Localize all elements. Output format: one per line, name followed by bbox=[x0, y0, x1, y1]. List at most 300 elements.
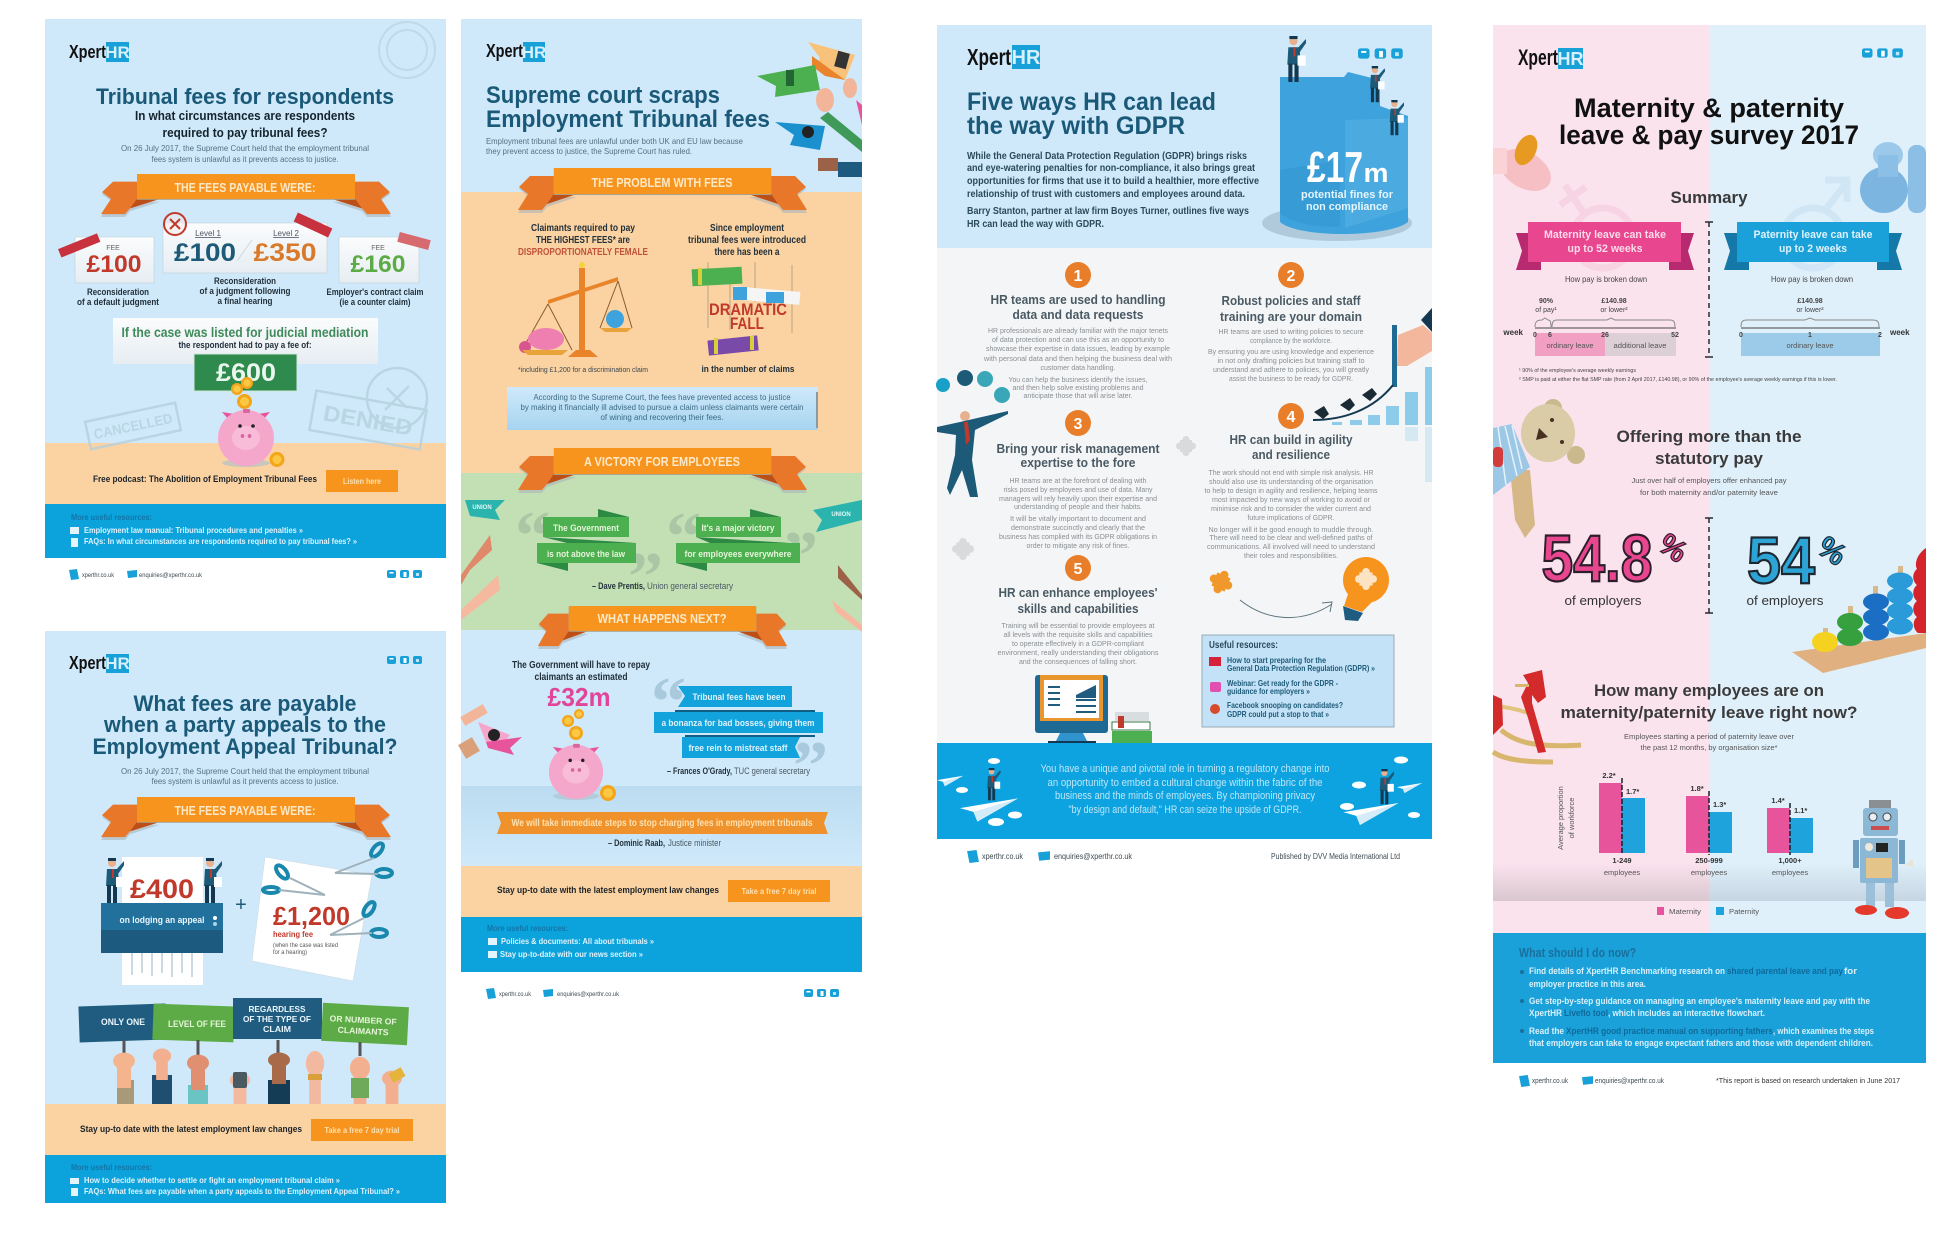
timeline: paternity pay: week bbox=[1889, 328, 1910, 337]
timeline: paternity pay bbox=[1739, 275, 1910, 356]
ribbon: a victory for employees: A VICTORY FOR EMPLOYEES bbox=[584, 454, 740, 469]
resources strip: How to decide whether to settle or fight an employment tribunal claim » bbox=[84, 1175, 340, 1185]
fee card: counter claim: £160 bbox=[350, 251, 406, 278]
title bbox=[1559, 93, 1859, 150]
quote: the government: ” bbox=[628, 539, 663, 616]
attribution: dave prentis: – Dave Prentis, bbox=[592, 581, 645, 591]
illustration: pink flag bbox=[458, 704, 522, 759]
section 3: understanding of people and their habits. bbox=[1014, 502, 1142, 511]
footer contacts: enquiries@xperthr.co.uk bbox=[1595, 1078, 1664, 1085]
box: useful resources: General Data Protection Regulation (GDPR) » bbox=[1227, 664, 1375, 673]
social icons bbox=[1862, 48, 1903, 58]
text: highest fees: THE HIGHEST FEES* are bbox=[536, 235, 630, 246]
fee card: final hearing: Level 1 bbox=[195, 229, 221, 238]
timeline: maternity pay: 52 bbox=[1671, 332, 1679, 339]
trial call to action: Stay up-to date with the latest employment law changes bbox=[497, 885, 719, 896]
title bbox=[967, 88, 1216, 140]
footer contacts: *This report is based on research undertaken in June 2017 bbox=[1716, 1076, 1900, 1085]
quote: bonanza for bad bosses: a bonanza for bad bosses, giving them bbox=[662, 718, 814, 729]
fee card: final hearing: £100 bbox=[174, 239, 236, 267]
quote: major victory: ” bbox=[783, 518, 818, 595]
ribbon: maternity leave bbox=[1516, 222, 1694, 270]
protest sign: level of fee: LEVEL OF FEE bbox=[168, 1019, 226, 1029]
section 5: Training will be essential to provide employees at bbox=[1002, 621, 1155, 630]
attribution: dominic raab: – Dominic Raab, bbox=[608, 838, 665, 848]
what should I do now: Find details of XpertHR Benchmarking research on bbox=[1529, 966, 1725, 976]
timeline: paternity pay: 1 bbox=[1808, 332, 1812, 339]
illustration: paper planes right bbox=[1340, 756, 1422, 825]
illustration: baby shoes bbox=[1860, 142, 1926, 213]
panel: employment appeal tribunal fees bbox=[45, 631, 446, 1203]
statistic: 54%: % bbox=[1811, 530, 1852, 573]
resources strip: More useful resources: bbox=[71, 1163, 152, 1172]
ribbon: paternity leave: Paternity leave can take bbox=[1754, 229, 1872, 241]
text: enhanced pay: for both maternity and/or paternity leave bbox=[1640, 488, 1778, 497]
callout: supreme court statement: According to the Supreme Court, the fees have prevented access to justice bbox=[534, 392, 791, 402]
illustration: abacus toy bbox=[1792, 548, 1926, 673]
timeline: maternity pay bbox=[1502, 275, 1679, 356]
protest sign: or number of claimants bbox=[321, 1003, 409, 1045]
fee card: counter claim: FEE bbox=[371, 245, 385, 252]
bar chart: 1.3* bbox=[1713, 800, 1726, 809]
text: £32m repayment bbox=[512, 660, 650, 712]
illustration: blue tower with £17m: non compliance bbox=[1306, 201, 1388, 213]
what should I do now: for bbox=[1844, 966, 1858, 976]
intro text bbox=[121, 143, 369, 164]
box: useful resources bbox=[1202, 635, 1394, 727]
illustration: toy robot bbox=[1853, 800, 1913, 919]
heading: offering more: statutory pay bbox=[1655, 449, 1764, 468]
protest sign: only one: ONLY ONE bbox=[101, 1017, 145, 1027]
text: highest fees: DISPROPORTIONATELY FEMALE bbox=[518, 247, 648, 258]
footer contacts bbox=[967, 850, 1400, 863]
plus sign: + bbox=[235, 894, 247, 916]
timeline: maternity pay: ordinary leave bbox=[1546, 343, 1594, 350]
fee card: default judgment: Reconsideration bbox=[87, 287, 149, 298]
quote: major victory: It's a major victory bbox=[702, 523, 775, 534]
legend: Maternity bbox=[1669, 907, 1701, 916]
banner: immediate steps bbox=[497, 812, 828, 834]
section 4: future implications of GDPR. bbox=[1248, 513, 1334, 522]
intro text: On 26 July 2017, the Supreme Court held that the employment tribunal bbox=[121, 766, 369, 776]
section 2: 2 bbox=[1287, 268, 1296, 285]
text: highest fees bbox=[518, 223, 648, 258]
text: highest fees: Claimants required to pay bbox=[531, 223, 635, 234]
protest sign: regardless of the type of claim: CLAIM bbox=[263, 1024, 291, 1034]
logo: Xpert bbox=[967, 44, 1011, 70]
intro text: relationship of trust with customers and employees around data. bbox=[967, 189, 1245, 200]
text: £32m repayment: £32m bbox=[548, 682, 610, 712]
ribbon: what happens next: WHAT HAPPENS NEXT? bbox=[598, 611, 727, 626]
closing message: "by design and default," HR can seize the upside of GDPR. bbox=[1068, 804, 1302, 816]
logo: HR bbox=[1558, 49, 1584, 69]
section 2: understand and adhere to policies, you will greatly bbox=[1213, 365, 1369, 374]
logo: HR bbox=[105, 43, 130, 62]
timeline: paternity pay: or lower² bbox=[1796, 307, 1824, 314]
timeline: maternity pay: 90% bbox=[1539, 298, 1554, 305]
illustration: teddy bear bbox=[1493, 399, 1585, 538]
resources strip bbox=[70, 1163, 400, 1196]
title: Supreme court scraps bbox=[486, 82, 720, 109]
statistic: 54% bbox=[1746, 523, 1852, 608]
closing message: You have a unique and pivotal role in turning a regulatory change into bbox=[1040, 763, 1330, 775]
callout: judicial mediation: If the case was listed for judicial mediation bbox=[122, 325, 368, 340]
statistic: 54.8%: 54.8 bbox=[1542, 521, 1652, 595]
section 3: managers will rely heavily upon their expertise and bbox=[999, 494, 1157, 503]
what should I do now: XpertHR good practice manual on supporting fathers bbox=[1566, 1026, 1773, 1036]
faded stamps: CANCELLED bbox=[92, 410, 174, 442]
section 4: to help to design in agility and resilience, helping teams bbox=[1204, 486, 1378, 495]
flags: union bbox=[465, 500, 862, 532]
bar chart: employees bbox=[1604, 868, 1640, 877]
box: useful resources: Webinar: Get ready for the GDPR - bbox=[1227, 679, 1338, 688]
section 5: and the consequences of falling short. bbox=[1019, 657, 1137, 666]
section 4: should also use its understanding of the organisation bbox=[1209, 477, 1373, 486]
section 2: training are your domain bbox=[1220, 309, 1362, 324]
trial call to action bbox=[80, 1119, 413, 1141]
box: useful resources: Useful resources: bbox=[1209, 640, 1278, 651]
quote: bonanza for bad bosses: Tribunal fees have been bbox=[692, 692, 786, 703]
subtitle: required to pay tribunal fees? bbox=[162, 125, 328, 140]
logo: HR bbox=[522, 43, 546, 62]
banner: immediate steps: We will take immediate steps to stop charging fees in employment tribunals bbox=[512, 818, 813, 829]
quote: major victory bbox=[666, 499, 818, 595]
footnote and caption: in the number of claims bbox=[702, 364, 794, 375]
illustration: blue tower with £17m bbox=[1262, 36, 1412, 241]
icon: faint male symbol bbox=[1783, 180, 1847, 268]
fee card: final hearing: £350 bbox=[254, 239, 316, 267]
text: chart description bbox=[1624, 732, 1795, 752]
ribbon: paternity leave bbox=[1724, 222, 1902, 270]
bar chart: employees bbox=[1772, 868, 1808, 877]
closing message bbox=[1040, 763, 1330, 816]
intro text: While the General Data Protection Regulation (GDPR) brings risks bbox=[967, 151, 1247, 162]
title: leave & pay survey 2017 bbox=[1559, 120, 1859, 150]
logo: Xpert bbox=[69, 653, 106, 673]
what should I do now bbox=[1519, 945, 1874, 1048]
quote: bonanza for bad bosses: “ bbox=[651, 664, 686, 741]
section 4: The work should not end with simple risk analysis. HR bbox=[1208, 468, 1374, 477]
timeline: maternity pay: of pay¹ bbox=[1535, 307, 1557, 314]
quote: major victory: for employees everywhere bbox=[684, 549, 792, 560]
fee card: counter claim: (ie a counter claim) bbox=[340, 297, 410, 308]
section 4: their roles and responsibilities. bbox=[1244, 551, 1338, 560]
intro text bbox=[121, 766, 369, 786]
illustration: dramatic fall bbox=[692, 262, 800, 356]
footer contacts bbox=[69, 569, 422, 580]
fee card: default judgment: of a default judgment bbox=[77, 297, 160, 308]
statistic: 54%: of employers bbox=[1746, 593, 1824, 608]
bar chart: employees bbox=[1691, 868, 1727, 877]
quote: the government: is not above the law bbox=[547, 549, 626, 560]
icon: faint female symbol bbox=[1560, 185, 1633, 268]
section 3: expertise to the fore bbox=[1020, 455, 1136, 470]
illustration: blue tower with £17m: potential fines for bbox=[1301, 189, 1394, 201]
section 1: You can help the business identify the issues, bbox=[1008, 375, 1148, 384]
protest sign: level of fee bbox=[152, 1004, 235, 1042]
what should I do now: Read the bbox=[1529, 1026, 1564, 1036]
fee card: counter claim bbox=[326, 232, 431, 308]
text: chart description: Employees starting a period of paternity leave over bbox=[1624, 732, 1795, 741]
illustration: hand pen runners and bars bbox=[1313, 308, 1432, 482]
quote: the government bbox=[515, 498, 663, 616]
footer contacts: xperthr.co.uk bbox=[82, 572, 115, 579]
section 2: in not only drafting policies but training staff to bbox=[1218, 356, 1364, 365]
section 2: HR teams are used to writing policies to secure bbox=[1218, 327, 1364, 336]
illustration: £400 shredder bbox=[101, 857, 223, 985]
section 1: and then help solve existing problems and bbox=[1012, 383, 1144, 392]
heading: how many employees bbox=[1560, 681, 1858, 722]
section 1: data and data requests bbox=[1012, 307, 1144, 322]
social icons bbox=[1358, 48, 1403, 59]
title bbox=[92, 691, 398, 759]
podcast call to action: Free podcast: The Abolition of Employment Tribunal Fees bbox=[93, 474, 317, 485]
text: since fees: Since employment bbox=[710, 223, 785, 234]
text: chart description: the past 12 months, by organisation size* bbox=[1640, 743, 1778, 752]
what should I do now: , which includes an interactive flowchart. bbox=[1608, 1008, 1765, 1018]
intro text: HR can lead the way with GDPR. bbox=[967, 219, 1104, 230]
fee card: final hearing: Reconsideration bbox=[214, 276, 276, 287]
attribution: frances o'grady: TUC general secretary bbox=[734, 766, 810, 776]
box: useful resources: Facebook snooping on candidates? bbox=[1227, 701, 1343, 710]
quote: bonanza for bad bosses: free rein to mistreat staff bbox=[688, 743, 788, 754]
resources strip: More useful resources: bbox=[71, 513, 152, 522]
callout: supreme court statement: by making it financially ill advised to pursue a claim unless claimants were certain bbox=[520, 402, 804, 412]
what should I do now: XpertHR bbox=[1529, 1008, 1562, 1018]
ribbon: maternity leave: up to 52 weeks bbox=[1568, 243, 1642, 255]
intro text: opportunities for firms that use it to build a healthier, more effective bbox=[967, 176, 1259, 187]
footer contacts: xperthr.co.uk bbox=[982, 852, 1024, 861]
footnotes: ¹ 90% of the employee's average weekly earnings bbox=[1519, 368, 1636, 374]
logo: HR bbox=[1012, 47, 1041, 69]
flags: union: UNION bbox=[831, 512, 851, 518]
illustration: blue tower with £17m: m bbox=[1364, 158, 1388, 188]
section 1: showcase their expertise in data issues, leading by example bbox=[986, 344, 1170, 353]
attribution: dominic raab: Justice minister bbox=[668, 838, 721, 848]
text: enhanced pay: Just over half of employers offer enhanced pay bbox=[1632, 476, 1787, 485]
resources strip: FAQs: In what circumstances are respondents required to pay tribunal fees? » bbox=[84, 536, 357, 546]
timeline: paternity pay: 0 bbox=[1739, 332, 1743, 339]
trial call to action: Take a free 7 day trial bbox=[324, 1126, 400, 1135]
section 4: HR can build in agility bbox=[1230, 432, 1353, 447]
section 4: There will need to be clear and well-defined paths of bbox=[1210, 533, 1373, 542]
protest sign: only one bbox=[78, 1003, 167, 1042]
illustration: man with data icons bbox=[936, 370, 1010, 497]
footer contacts bbox=[486, 988, 839, 999]
resources strip: Employment law manual: Tribunal procedures and penalties » bbox=[84, 525, 303, 535]
illustration: flags and raised arms bbox=[757, 42, 862, 177]
section 4: No longer will it be good enough to muddle through. bbox=[1208, 525, 1374, 534]
text: since fees: tribunal fees were introduced bbox=[688, 235, 806, 246]
timeline: maternity pay: How pay is broken down bbox=[1565, 275, 1647, 284]
faded stamps: DENIED bbox=[321, 400, 414, 441]
attribution: dave prentis: Union general secretary bbox=[647, 581, 733, 591]
illustration: dummy pacifier bbox=[1492, 131, 1558, 200]
resources strip bbox=[487, 924, 654, 959]
intro text: Barry Stanton, partner at law firm Boyes Turner, outlines five ways bbox=[967, 206, 1249, 217]
timeline: paternity pay: ordinary leave bbox=[1786, 343, 1834, 350]
title: when a party appeals to the bbox=[103, 712, 386, 737]
resources strip: Policies & documents: All about tribunals » bbox=[501, 936, 654, 946]
section 1: anticipate those that will arise later. bbox=[1024, 391, 1132, 400]
section 4: communications. All involved will need to understand bbox=[1207, 542, 1375, 551]
protest sign: or number of claimants: CLAIMANTS bbox=[337, 1025, 389, 1037]
what should I do now: Liveflo tool bbox=[1564, 1008, 1608, 1018]
statistic: 54.8%: of employers bbox=[1564, 593, 1642, 608]
statistic: 54%: 54 bbox=[1747, 523, 1815, 597]
what should I do now: shared parental leave and pay bbox=[1727, 966, 1843, 976]
section 5: all levels with the requisite skills and capabilities bbox=[1004, 630, 1153, 639]
callout: supreme court statement: of wining and recovering their fees. bbox=[600, 412, 724, 422]
section 4 bbox=[1204, 403, 1378, 560]
resources strip: More useful resources: bbox=[487, 924, 568, 933]
illustration: dramatic fall: DRAMATIC bbox=[709, 300, 787, 319]
bar chart: 1,000+ bbox=[1778, 856, 1802, 865]
quote: bonanza for bad bosses bbox=[651, 664, 828, 805]
subtitle: In what circumstances are respondents bbox=[135, 108, 355, 123]
illustration: clapping hands bbox=[461, 535, 862, 632]
ribbon: the fees payable were bbox=[101, 797, 391, 840]
text: since fees: there has been a bbox=[714, 247, 780, 258]
section 3: risks posed by employees and use of data. Many bbox=[1004, 485, 1153, 494]
illustration: £1,200 hearing fee note with scissors: hearing fee bbox=[273, 930, 314, 939]
protest sign: regardless of the type of claim bbox=[233, 998, 322, 1039]
section 2 bbox=[1208, 262, 1374, 383]
section 3: order to mitigate any risk of fines. bbox=[1026, 541, 1130, 550]
footer contacts: enquiries@xperthr.co.uk bbox=[139, 572, 203, 579]
footnote and caption: *including £1,200 for a discrimination claim bbox=[518, 367, 648, 374]
ribbon: the problem with fees bbox=[518, 168, 807, 213]
illustration: £400 shredder: £400 bbox=[130, 874, 194, 904]
fee card: final hearing bbox=[163, 212, 332, 307]
section 3: business has complied with its GDPR obligations in bbox=[999, 532, 1157, 541]
illustration: dramatic fall: FALL bbox=[730, 314, 764, 333]
footnote and caption bbox=[518, 364, 794, 375]
quote: the government: “ bbox=[515, 498, 550, 575]
timeline: maternity pay: additional leave bbox=[1614, 343, 1667, 350]
logo: Xpert bbox=[69, 42, 106, 62]
ribbon: the fees payable were: THE FEES PAYABLE WERE: bbox=[174, 803, 316, 818]
ribbon: maternity leave: Maternity leave can take bbox=[1544, 229, 1666, 241]
podcast call to action bbox=[93, 470, 398, 492]
footnotes: ² SMP is paid at either the flat SMP rate (from 2 April 2017, £140.98), or 90% of the employee's average weekly earnings if this is lower. bbox=[1519, 377, 1837, 383]
icon: faded stamp top right bbox=[379, 22, 435, 78]
illustration: raised hands bbox=[113, 1040, 406, 1104]
quote: bonanza for bad bosses: ” bbox=[793, 728, 828, 805]
logo: Xpert bbox=[486, 41, 523, 61]
ribbon: what happens next bbox=[538, 606, 787, 649]
box: useful resources: guidance for employers » bbox=[1227, 687, 1310, 696]
resources strip: Stay up-to-date with our news section » bbox=[500, 949, 643, 959]
podcast call to action: Listen here bbox=[343, 477, 381, 486]
illustration: computer and books bbox=[1035, 675, 1152, 743]
ribbon: paternity leave: up to 2 weeks bbox=[1779, 243, 1847, 255]
bar chart: Average proportion bbox=[1556, 786, 1565, 850]
title: Maternity & paternity bbox=[1574, 93, 1844, 123]
fee card: default judgment bbox=[58, 233, 160, 308]
section 5: HR can enhance employees' bbox=[998, 585, 1158, 600]
resources strip: FAQs: What fees are payable when a party appeals to the Employment Appeal Tribunal? » bbox=[84, 1186, 400, 1196]
section 2: By ensuring you are using knowledge and experience bbox=[1208, 347, 1374, 356]
protest sign: regardless of the type of claim: REGARDLESS bbox=[248, 1004, 306, 1014]
resources strip bbox=[70, 513, 357, 547]
bar chart: of workforce bbox=[1567, 798, 1576, 838]
section 1: HR teams are used to handling bbox=[990, 292, 1166, 307]
section 3: 3 bbox=[1074, 416, 1083, 433]
faded stamps bbox=[85, 368, 427, 449]
callout: supreme court statement bbox=[507, 387, 818, 430]
timeline: paternity pay: 2 bbox=[1878, 332, 1882, 339]
social icons bbox=[387, 656, 422, 664]
what should I do now: that employers can take to engage expectant fathers and those with dependent children. bbox=[1529, 1038, 1873, 1048]
timeline: maternity pay: or lower² bbox=[1600, 307, 1628, 314]
section 1: 1 bbox=[1074, 268, 1083, 285]
fee card: default judgment: FEE bbox=[106, 245, 120, 252]
what should I do now: What should I do now? bbox=[1519, 945, 1636, 960]
title: Employment Appeal Tribunal? bbox=[92, 734, 398, 759]
section 2: compliance by the workforce. bbox=[1250, 336, 1332, 345]
section 1: HR professionals are already familiar with the major tenets bbox=[988, 326, 1168, 335]
section 3: It will be vitally important to document and bbox=[1010, 514, 1146, 523]
illustration: £400 shredder: on lodging an appeal bbox=[120, 915, 204, 925]
section 2: assist the business to be ready for GDPR. bbox=[1229, 374, 1353, 383]
section 4: minimise risk and to consider the wider current and bbox=[1211, 504, 1371, 513]
section 5: environment, really understanding their obligations bbox=[998, 648, 1159, 657]
ribbon: the problem with fees: THE PROBLEM WITH FEES bbox=[592, 175, 733, 190]
timeline: paternity pay: £140.98 bbox=[1797, 298, 1823, 305]
section 5: to operate effectively in a GDPR-compliant bbox=[1012, 639, 1145, 648]
section 3 bbox=[996, 410, 1160, 550]
panel: tribunal fees for respondents bbox=[45, 19, 446, 580]
bar chart: 1.7* bbox=[1626, 787, 1639, 796]
legend: Paternity bbox=[1729, 907, 1759, 916]
quote: major victory: “ bbox=[666, 499, 701, 576]
intro text: and eye-watering penalties for non-compliance, it also brings great bbox=[967, 163, 1256, 174]
attribution: dave prentis bbox=[592, 581, 733, 591]
illustration: £1,200 hearing fee note with scissors: (when the case was listed bbox=[273, 943, 338, 949]
bar chart: 1.4* bbox=[1771, 796, 1785, 805]
heading: offering more: Offering more than the bbox=[1616, 427, 1802, 446]
intro text bbox=[486, 136, 743, 156]
section 1 bbox=[983, 262, 1172, 400]
protest sign: regardless of the type of claim: OF THE TYPE OF bbox=[243, 1014, 311, 1024]
illustration: £1,200 hearing fee note with scissors bbox=[252, 841, 392, 981]
quote: the government: The Government bbox=[553, 523, 620, 534]
intro text bbox=[967, 151, 1259, 230]
illustration: lightbulb with puzzle piece bbox=[1205, 557, 1389, 621]
fee card: final hearing: Level 2 bbox=[273, 229, 299, 238]
divider: middle bbox=[1705, 518, 1713, 613]
illustration: rocking horse bbox=[1493, 670, 1581, 762]
heading: how many employees: How many employees are on bbox=[1594, 681, 1824, 700]
text: since fees bbox=[688, 223, 806, 258]
divider: top bbox=[1705, 222, 1713, 357]
footnotes bbox=[1519, 368, 1837, 383]
footer contacts: enquiries@xperthr.co.uk bbox=[1054, 852, 1133, 861]
footer contacts: enquiries@xperthr.co.uk bbox=[557, 991, 620, 998]
banknote: £600: £600 bbox=[216, 359, 276, 387]
panel: five ways HR can lead on GDPR bbox=[936, 25, 1432, 863]
section 3: HR teams are at the forefront of dealing with bbox=[1010, 476, 1146, 485]
ribbon: the fees payable were bbox=[101, 174, 391, 217]
text: £32m repayment: The Government will have to repay bbox=[512, 660, 650, 671]
section 1: with personal data and then helping the business deal with bbox=[983, 354, 1172, 363]
title bbox=[486, 82, 770, 133]
section 4: most impacted by new ways of working to avoid or bbox=[1212, 495, 1370, 504]
illustration: £1,200 hearing fee note with scissors: £1,200 bbox=[273, 901, 350, 931]
illustration: £1,200 hearing fee note with scissors: for a hearing) bbox=[273, 950, 307, 956]
illustration: piggy bank bbox=[549, 709, 616, 801]
